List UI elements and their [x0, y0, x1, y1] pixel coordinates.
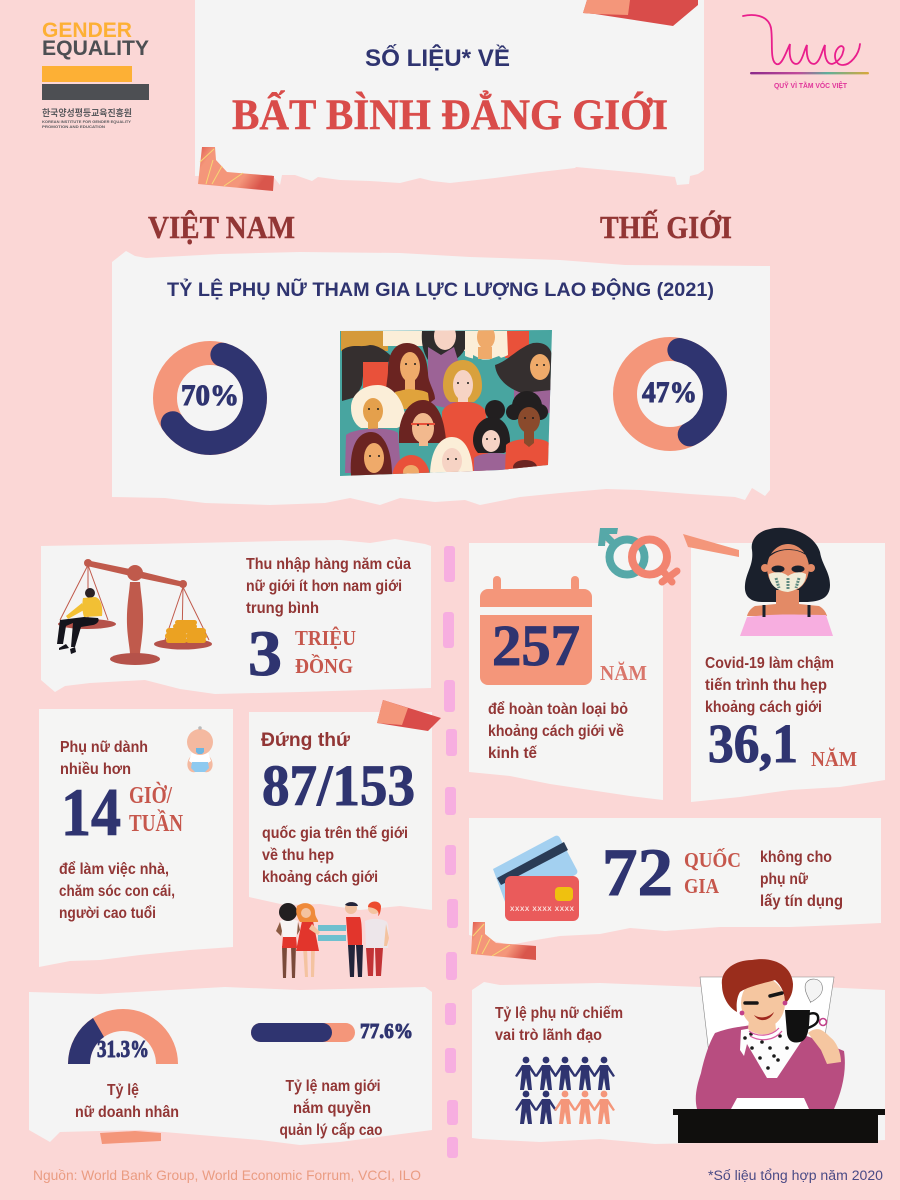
text: women spend more: nhiều hơn [60, 761, 131, 778]
text: Covid slows progress: khoảng cách giới [705, 699, 822, 716]
main title: BẤT BÌNH ĐẲNG GIỚI [232, 90, 668, 139]
icon: baby [187, 726, 213, 772]
half donut: 31.3% [68, 1009, 178, 1064]
text: women entrepreneurs: nữ doanh nhân [75, 1104, 179, 1121]
tape: credit panel [471, 922, 536, 960]
text: male senior managers: Tỷ lệ nam giới [286, 1078, 380, 1095]
text: credit access: không cho [760, 849, 832, 866]
panel: 14 hours [39, 709, 233, 967]
figure: 72: 72 [602, 834, 673, 910]
text: countries [262, 825, 408, 886]
illustration: businesswoman at desk [673, 959, 885, 1143]
tape: bottom left [198, 147, 274, 191]
text: leadership [495, 1005, 623, 1044]
text: women spend more [60, 739, 148, 778]
panel heading: TỶ LỆ PHỤ NỮ THAM GIA LỰC LƯỢNG LAO ĐỘNG (2021) [167, 279, 714, 301]
panel: title [195, 0, 704, 191]
text: male senior managers [280, 1078, 383, 1139]
text: housework [59, 860, 175, 922]
illustration: crowd of women [340, 322, 552, 479]
heading: Việt Nam: VIỆT NAM [148, 209, 295, 245]
pictogram: leaders 7 of 10 [515, 1057, 615, 1124]
text: male senior managers: quản lý cấp cao [280, 1122, 383, 1139]
text: closing the gap: kinh tế [488, 745, 537, 762]
progress bar: 77.6%: 77.6% [360, 1019, 413, 1043]
label: quốc gia: GIA [684, 874, 720, 898]
subtitle: SỐ LIỆU* VỀ [365, 44, 510, 72]
text: closing the gap: khoảng cách giới về [488, 723, 624, 740]
text: Covid slows progress: Covid-19 làm chậm [705, 655, 834, 672]
text: housework: người cao tuổi [59, 904, 156, 922]
text: women entrepreneurs [75, 1082, 179, 1121]
logo: Gender Equality: GENDER [42, 19, 132, 42]
figure: 14: 14 [61, 774, 121, 850]
text: income gap: trung bình [246, 600, 319, 617]
text: income gap: Thu nhập hàng năm của [246, 556, 411, 573]
text: closing the gap: để hoàn toàn loại bỏ [488, 700, 628, 718]
panel: women in leadership [472, 959, 885, 1144]
label: triệu đồng [295, 626, 356, 678]
text: Covid slows progress: tiến trình thu hẹp [705, 677, 827, 694]
label: năm: NĂM [811, 747, 857, 771]
text: women entrepreneurs: Tỷ lệ [107, 1082, 139, 1099]
panel: entrepreneurs and managers [29, 987, 432, 1145]
figure: 87/153: 87/153 [262, 753, 415, 818]
text: credit access [760, 849, 843, 910]
logo: Gender Equality: 한국양성평등교육진흥원 [42, 107, 132, 118]
logo: Gender Equality: KOREAN INSTITUTE FOR GENDER EQUALITY [42, 120, 132, 124]
tape: Covid panel [683, 534, 739, 557]
text: credit access: phụ nữ [760, 871, 808, 888]
half donut: 31.3%: 31.3% [97, 1037, 149, 1063]
figure: 36,1: 36,1 [708, 713, 798, 774]
text: income gap [246, 556, 411, 617]
illustration: woman with mask [740, 528, 833, 636]
panel: 72 countries [469, 818, 881, 960]
text: housework: chăm sóc con cái, [59, 883, 175, 900]
text: income gap: nữ giới ít hơn nam giới [246, 578, 402, 595]
panel: Covid-19 [683, 528, 885, 802]
icon: credit cards: XXXX XXXX XXXX [510, 906, 575, 913]
icon: credit cards [493, 836, 579, 921]
label: quốc gia: QUỐC [684, 848, 741, 872]
label: triệu đồng: ĐỒNG [295, 654, 353, 678]
panel: labour force participation [112, 251, 770, 505]
text: countries: về thu hẹp [262, 847, 334, 864]
logo: True, Quỹ Vì Tầm Vóc Việt: QUỸ VÌ TẦM VÓC VIỆT [774, 80, 847, 90]
figure: 3: 3 [248, 618, 282, 690]
label: giờ/tuần [129, 782, 184, 837]
text: leadership: vai trò lãnh đạo [495, 1027, 602, 1044]
center dashed divider [443, 546, 458, 1158]
panel: ranking 87/153 [29, 528, 885, 1183]
label: giờ/tuần: GIỜ/ [129, 782, 172, 809]
panel: calendar 257 years [469, 543, 663, 800]
icon: calendar [480, 576, 592, 685]
illustration: people with equal sign [276, 902, 389, 978]
text: credit access: lấy tín dụng [760, 893, 843, 910]
text: leadership: Tỷ lệ phụ nữ chiếm [495, 1005, 623, 1022]
donut: Thế giới 47% [625, 349, 715, 439]
text: housework: để làm việc nhà, [59, 860, 169, 878]
heading: Thế giới: THẾ GIỚI [600, 209, 732, 245]
logo: Gender Equality [42, 19, 149, 129]
logo: Gender Equality: EQUALITY [42, 37, 149, 60]
label: triệu đồng: TRIỆU [295, 626, 356, 650]
logo: True, Quỹ Vì Tầm Vóc Việt [743, 15, 869, 90]
text: ranked: Đứng thứ [261, 730, 350, 751]
donut: Thế giới 47%: 47% [642, 376, 697, 409]
icon: gender symbols [598, 528, 677, 582]
text: women spend more: Phụ nữ dành [60, 739, 148, 756]
text: Covid slows progress [705, 655, 834, 716]
label: giờ/tuần: TUẦN [129, 810, 184, 837]
donut: Việt Nam 70%: 70% [181, 379, 239, 412]
tape: bottom left panel [100, 1131, 161, 1144]
tape: top right [583, 0, 698, 26]
panel: annual income [41, 539, 431, 694]
text: countries: quốc gia trên thế giới [262, 825, 408, 842]
label: năm: NĂM [600, 661, 647, 685]
progress bar: 77.6% [251, 1019, 413, 1043]
data year note: *Số liệu tổng hợp năm 2020 [708, 1168, 883, 1183]
source note: Nguồn: World Bank Group, World Economic Forrum, VCCI, ILO [33, 1167, 421, 1183]
logo: Gender Equality: PROMOTION AND EDUCATION [42, 125, 105, 129]
text: male senior managers: nắm quyền [293, 1098, 371, 1117]
text: countries: khoảng cách giới [262, 869, 378, 886]
label: quốc gia [684, 848, 741, 898]
illustration: scales [57, 559, 212, 665]
tape: ranking panel [377, 700, 441, 731]
figure: 257: 257 [492, 613, 580, 678]
text: closing the gap [488, 700, 628, 762]
donut: Việt Nam 70% [165, 353, 255, 443]
